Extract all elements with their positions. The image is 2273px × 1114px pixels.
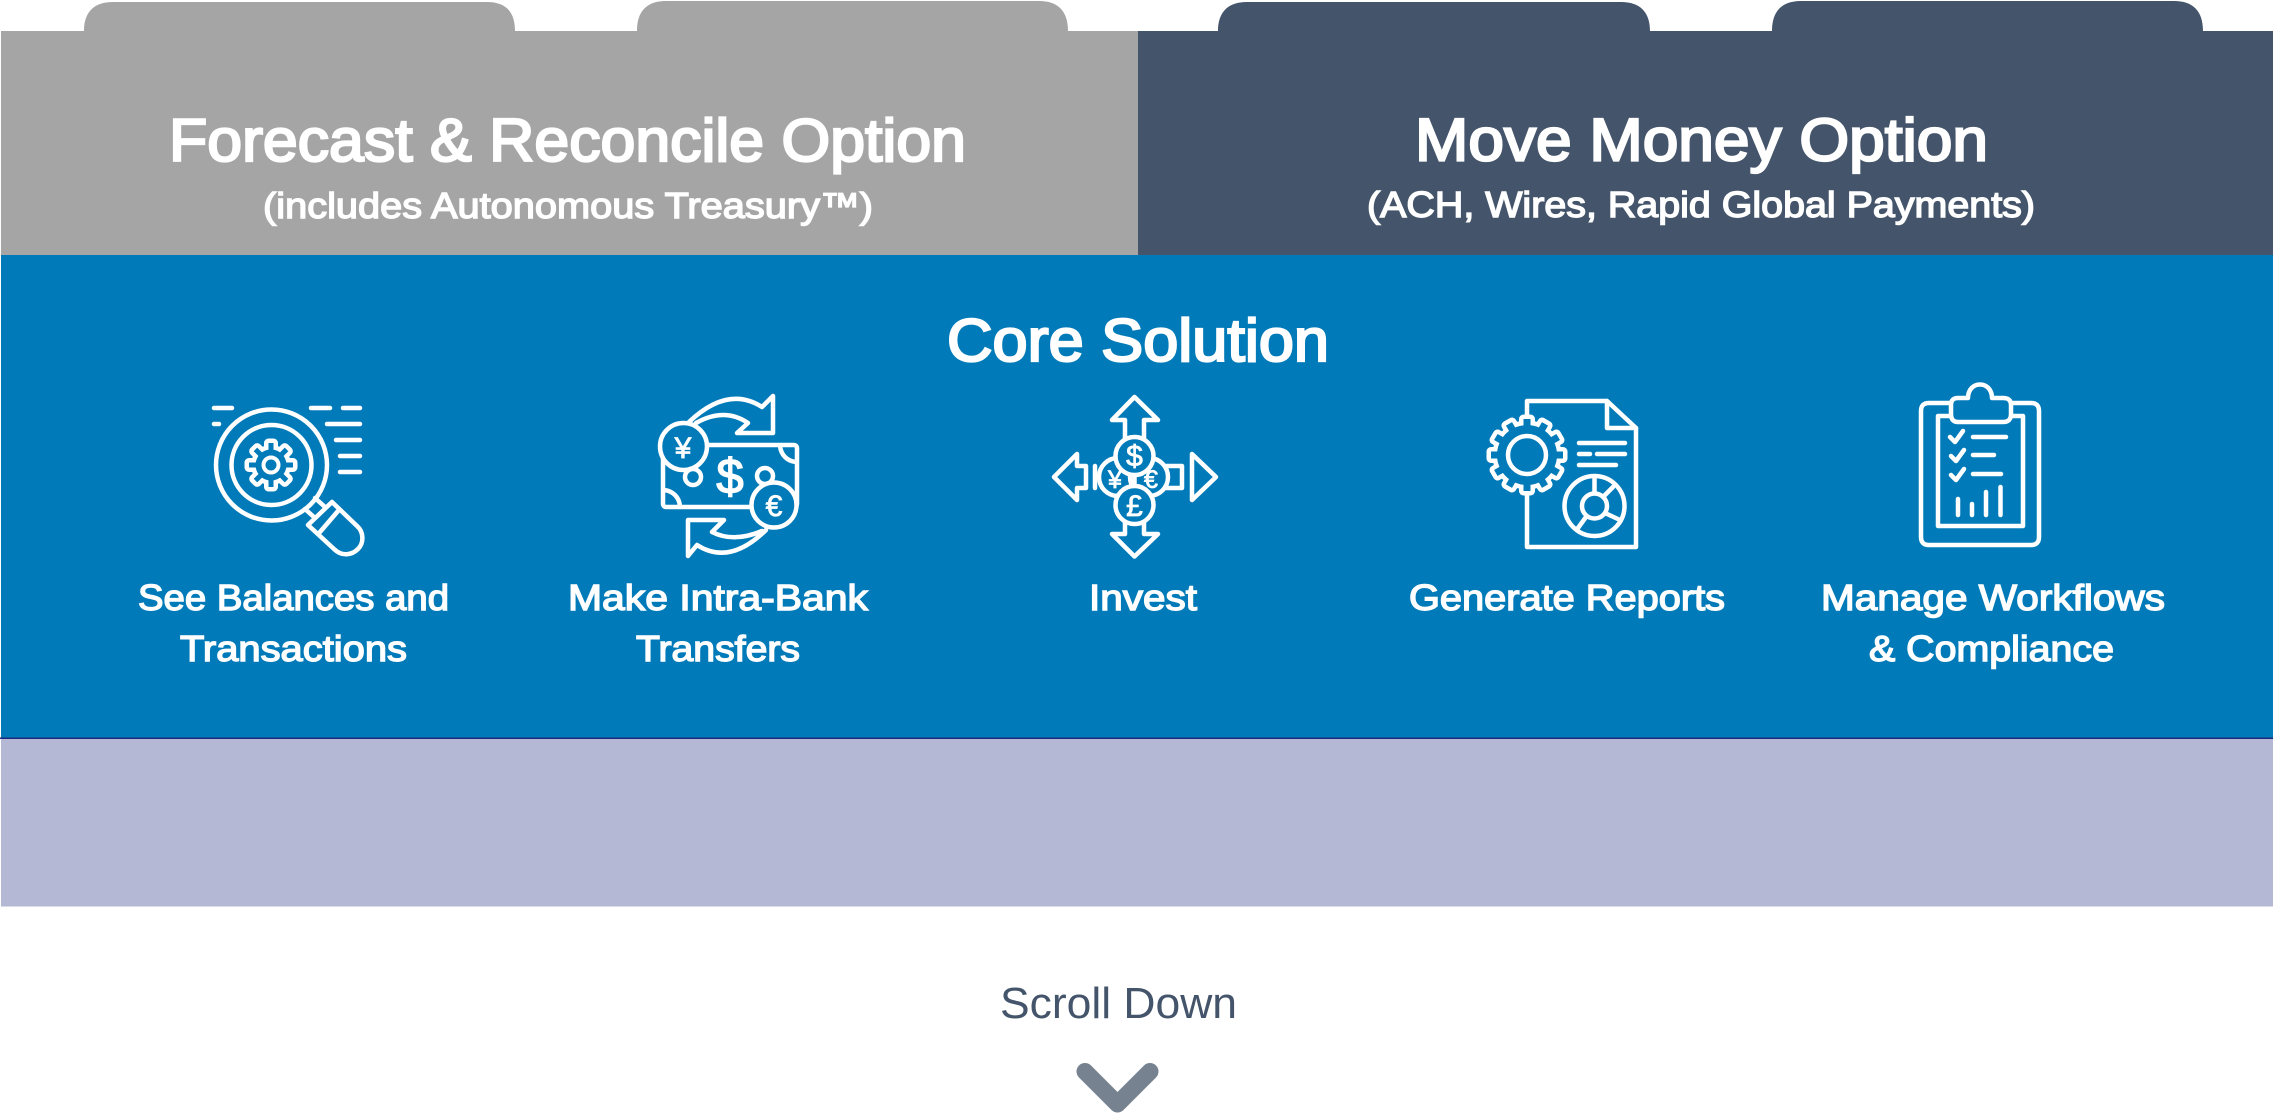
icon glyph: coin dollar: $ xyxy=(1126,440,1143,473)
label: Make Intra-Bank Transfers: Make Intra-Bank xyxy=(568,577,869,618)
text: Scroll Down: Scroll Down xyxy=(1000,979,1237,1028)
panel: Forecast & Reconcile Option xyxy=(1,1,1138,255)
label: Make Intra-Bank Transfers xyxy=(568,577,869,669)
panel: Core Solution xyxy=(1,255,2273,738)
label: See Balances and Transactions: See Balances and xyxy=(138,577,449,618)
label: See Balances and Transactions: Transactions xyxy=(180,628,407,669)
subheading: payment types: (ACH, Wires, Rapid Global Payments) xyxy=(1367,184,2035,225)
heading: Move Money Option: Move Money Option xyxy=(1415,106,1988,174)
icon: magnifier with gear xyxy=(214,408,362,554)
panel: Move Money Option xyxy=(1138,1,2273,255)
icon: invest arrows and coins xyxy=(1054,397,1216,556)
icon glyph: coin yen: ¥ xyxy=(1107,466,1122,494)
label: Generate Reports: Generate Reports xyxy=(1409,577,1725,618)
icon: chevron down xyxy=(1085,1072,1150,1104)
label: Make Intra-Bank Transfers: Transfers xyxy=(636,628,800,669)
icon glyph: yen: ¥ xyxy=(674,432,692,465)
label: See Balances and Transactions xyxy=(138,577,449,669)
label: Invest: Invest xyxy=(1089,577,1197,618)
heading: Forecast & Reconcile Option: Forecast & Reconcile Option xyxy=(169,107,966,174)
icon glyph: coin euro: € xyxy=(1144,466,1158,494)
label: Manage Workflows & Compliance: Manage Workflows xyxy=(1821,577,2165,618)
subheading: includes Autonomous Treasury: (includes Autonomous Treasury™) xyxy=(263,185,873,226)
icon glyph: euro: € xyxy=(766,490,783,523)
label: Manage Workflows & Compliance xyxy=(1821,577,2165,669)
icon glyph: coin pound: £ xyxy=(1126,490,1143,523)
icon: currency transfer xyxy=(660,396,797,556)
icon: clipboard checklist xyxy=(1921,384,2039,545)
icon: report with gear and pie chart xyxy=(1491,401,1636,547)
heading: Core Solution: Core Solution xyxy=(947,307,1329,374)
icon glyph: dollar: $ xyxy=(716,450,744,504)
panel: empty lavender band xyxy=(1,738,2273,906)
label: Manage Workflows & Compliance: & Compliance xyxy=(1869,628,2114,669)
